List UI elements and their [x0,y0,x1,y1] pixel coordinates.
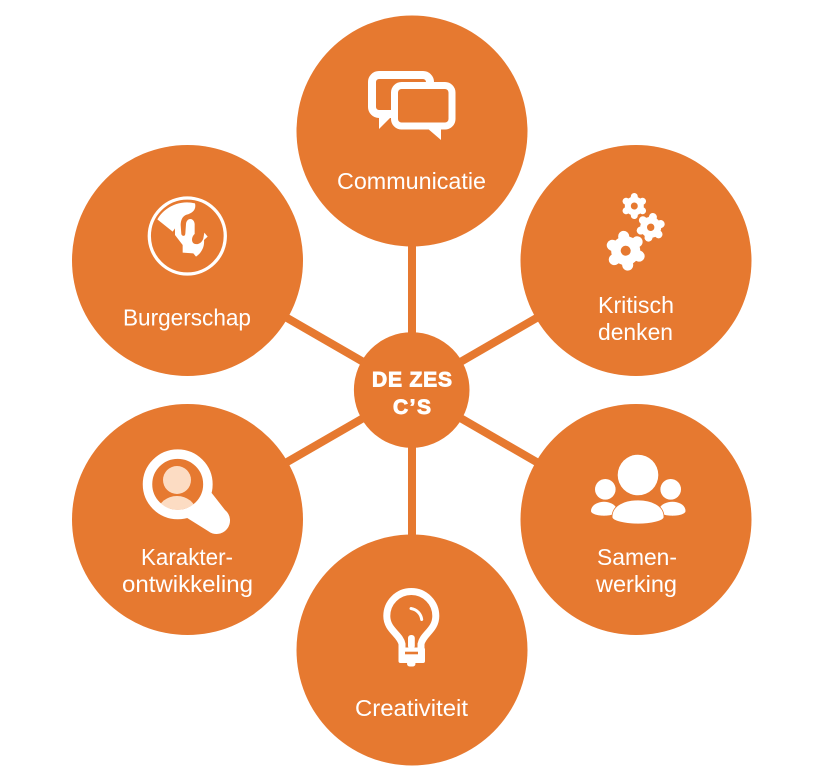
heading: De zes C's: DE ZES [372,368,452,392]
label: Karakterontwikkeling: ontwikkeling [122,571,253,597]
heading: De zes C's: C’S [393,396,431,419]
label: Samenwerking: Samen- [597,544,677,570]
label: Creativiteit: Creativiteit [355,695,469,721]
icon: magnifying glass with person [148,454,230,534]
icon: gears [609,196,663,267]
panel: Communicatie [296,16,528,246]
icon: speech bubbles [372,75,452,140]
label: Communicatie: Communicatie [337,168,486,194]
label: Kritisch denken: Kritisch [598,292,674,318]
panel: Samenwerking [520,404,752,635]
icon: globe [149,198,225,274]
label: Karakterontwikkeling: Karakter- [141,544,233,570]
icon: group of people [591,455,686,524]
panel: Karakterontwikkeling [72,404,303,635]
panel: Burgerschap [72,145,303,376]
connector lines [188,131,636,650]
icon: light bulb [387,592,436,666]
panel: Kritisch denken [520,145,752,376]
label: Samenwerking: werking [595,571,677,597]
panel: Creativiteit [296,534,528,766]
label: Burgerschap: Burgerschap [123,304,251,330]
label: Kritisch denken: denken [598,319,673,345]
panel: centre hub [354,332,470,448]
